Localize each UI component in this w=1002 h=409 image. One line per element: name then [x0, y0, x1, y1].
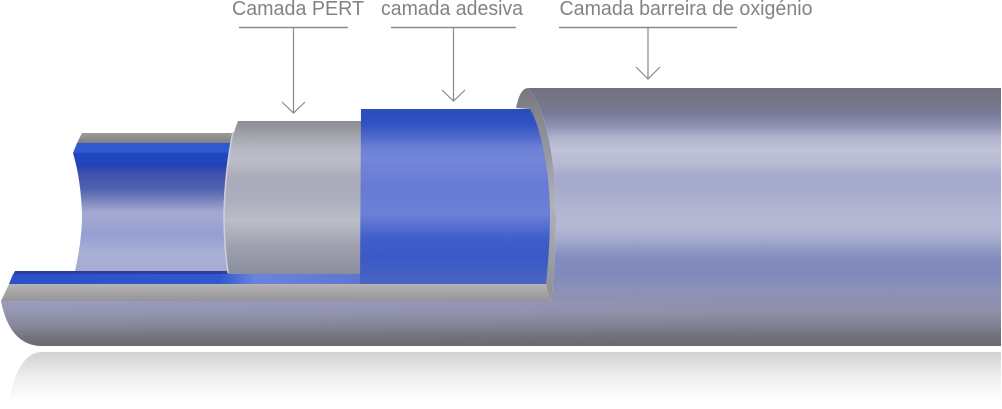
blue lower wall strip: [9, 274, 361, 284]
PERT layer light rim: [224, 132, 233, 273]
adhesive layer: [360, 109, 550, 284]
lighter lower front of outer layer: [1, 301, 392, 332]
label: Camada PERT: [232, 0, 364, 113]
reflection under the pipe: [9, 352, 1001, 402]
outer oxygen barrier layer: [1, 88, 1001, 346]
label: Camada barreira de oxigénio: [559, 0, 812, 79]
cut ring of outer layer: [516, 88, 556, 301]
inner pipe bore: [73, 143, 234, 271]
grey lower cut band: [1, 284, 551, 301]
inner pipe top cut edge: [77, 133, 234, 143]
label: camada adesiva: [381, 0, 524, 101]
dark edge of lower inner wall: [13, 271, 232, 275]
pipe cutaway illustration: [1, 88, 1001, 346]
PERT layer: [224, 121, 361, 274]
